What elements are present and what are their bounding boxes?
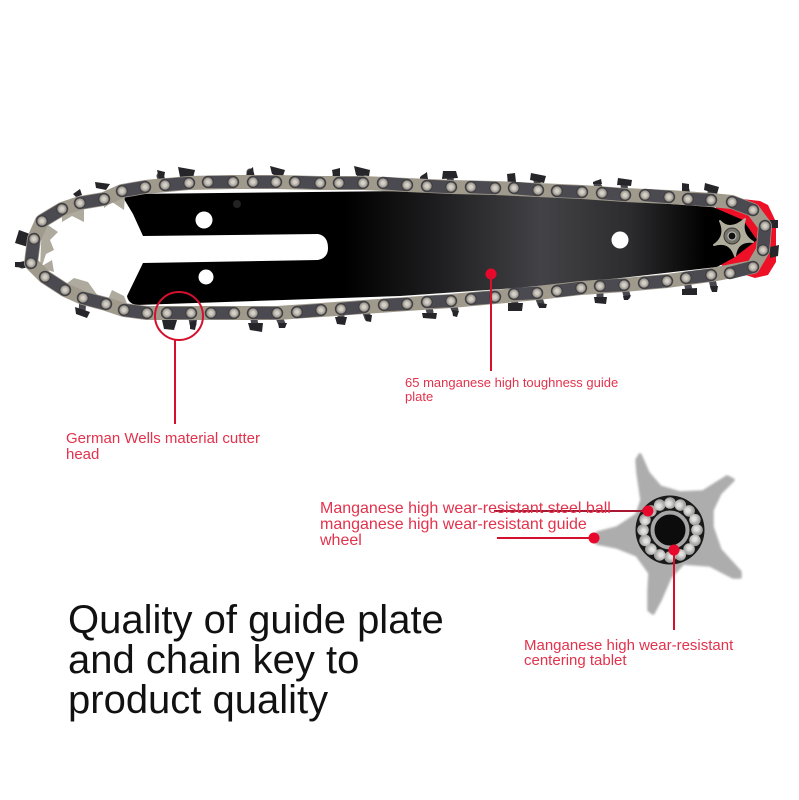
label: steel ball and guide wheel: Manganese high wear-resistant steel ball: [320, 500, 611, 517]
label: guide plate: 65 manganese high toughness guide: [405, 375, 618, 390]
bar hole: right: [612, 232, 628, 248]
label: steel ball and guide wheel: [320, 500, 611, 549]
title: [68, 598, 444, 722]
inner ring: [652, 512, 688, 548]
label: steel ball and guide wheel: wheel: [320, 532, 362, 549]
label: guide plate: plate: [405, 388, 433, 404]
callout: steel ball pointer: [494, 506, 654, 516]
bar hole: upper left: [196, 212, 212, 228]
title: product quality: [68, 678, 328, 722]
label: steel ball and guide wheel: manganese high wear-resistant guide: [320, 516, 587, 533]
title: and chain key to: [68, 638, 359, 682]
label: centering tablet: [524, 637, 734, 669]
guide bar: [124, 191, 757, 305]
callout: centering tablet pointer: [668, 544, 680, 630]
label: centering tablet: Manganese high wear-resistant: [524, 637, 733, 654]
label: cutter head: German Wells material cutter: [66, 430, 260, 447]
label: centering tablet: centering tablet: [524, 652, 627, 669]
chain cutter plates: [22, 172, 774, 326]
chain cutters: [15, 166, 779, 332]
label: guide plate: [405, 375, 618, 404]
large guide wheel star: [594, 455, 740, 613]
callout: red circle on cutter head: [155, 292, 203, 424]
callout: guide wheel pointer: [497, 532, 600, 544]
red nose highlight: [716, 196, 776, 278]
small nose sprocket: [714, 219, 753, 256]
label: cutter head: [66, 430, 260, 463]
bar hole: small dark: [233, 200, 241, 208]
bar hole: lower left: [198, 270, 214, 284]
chain rivets: [26, 177, 770, 318]
steel balls: [637, 497, 703, 563]
callout: guide plate pointer: [486, 268, 496, 371]
chain link plates: [31, 182, 765, 313]
title: Quality of guide plate: [68, 598, 444, 642]
bearing race: [636, 496, 704, 564]
inner tan teeth at chain nose: [40, 195, 128, 306]
chain track: [31, 182, 765, 313]
label: cutter head: head: [66, 446, 99, 463]
